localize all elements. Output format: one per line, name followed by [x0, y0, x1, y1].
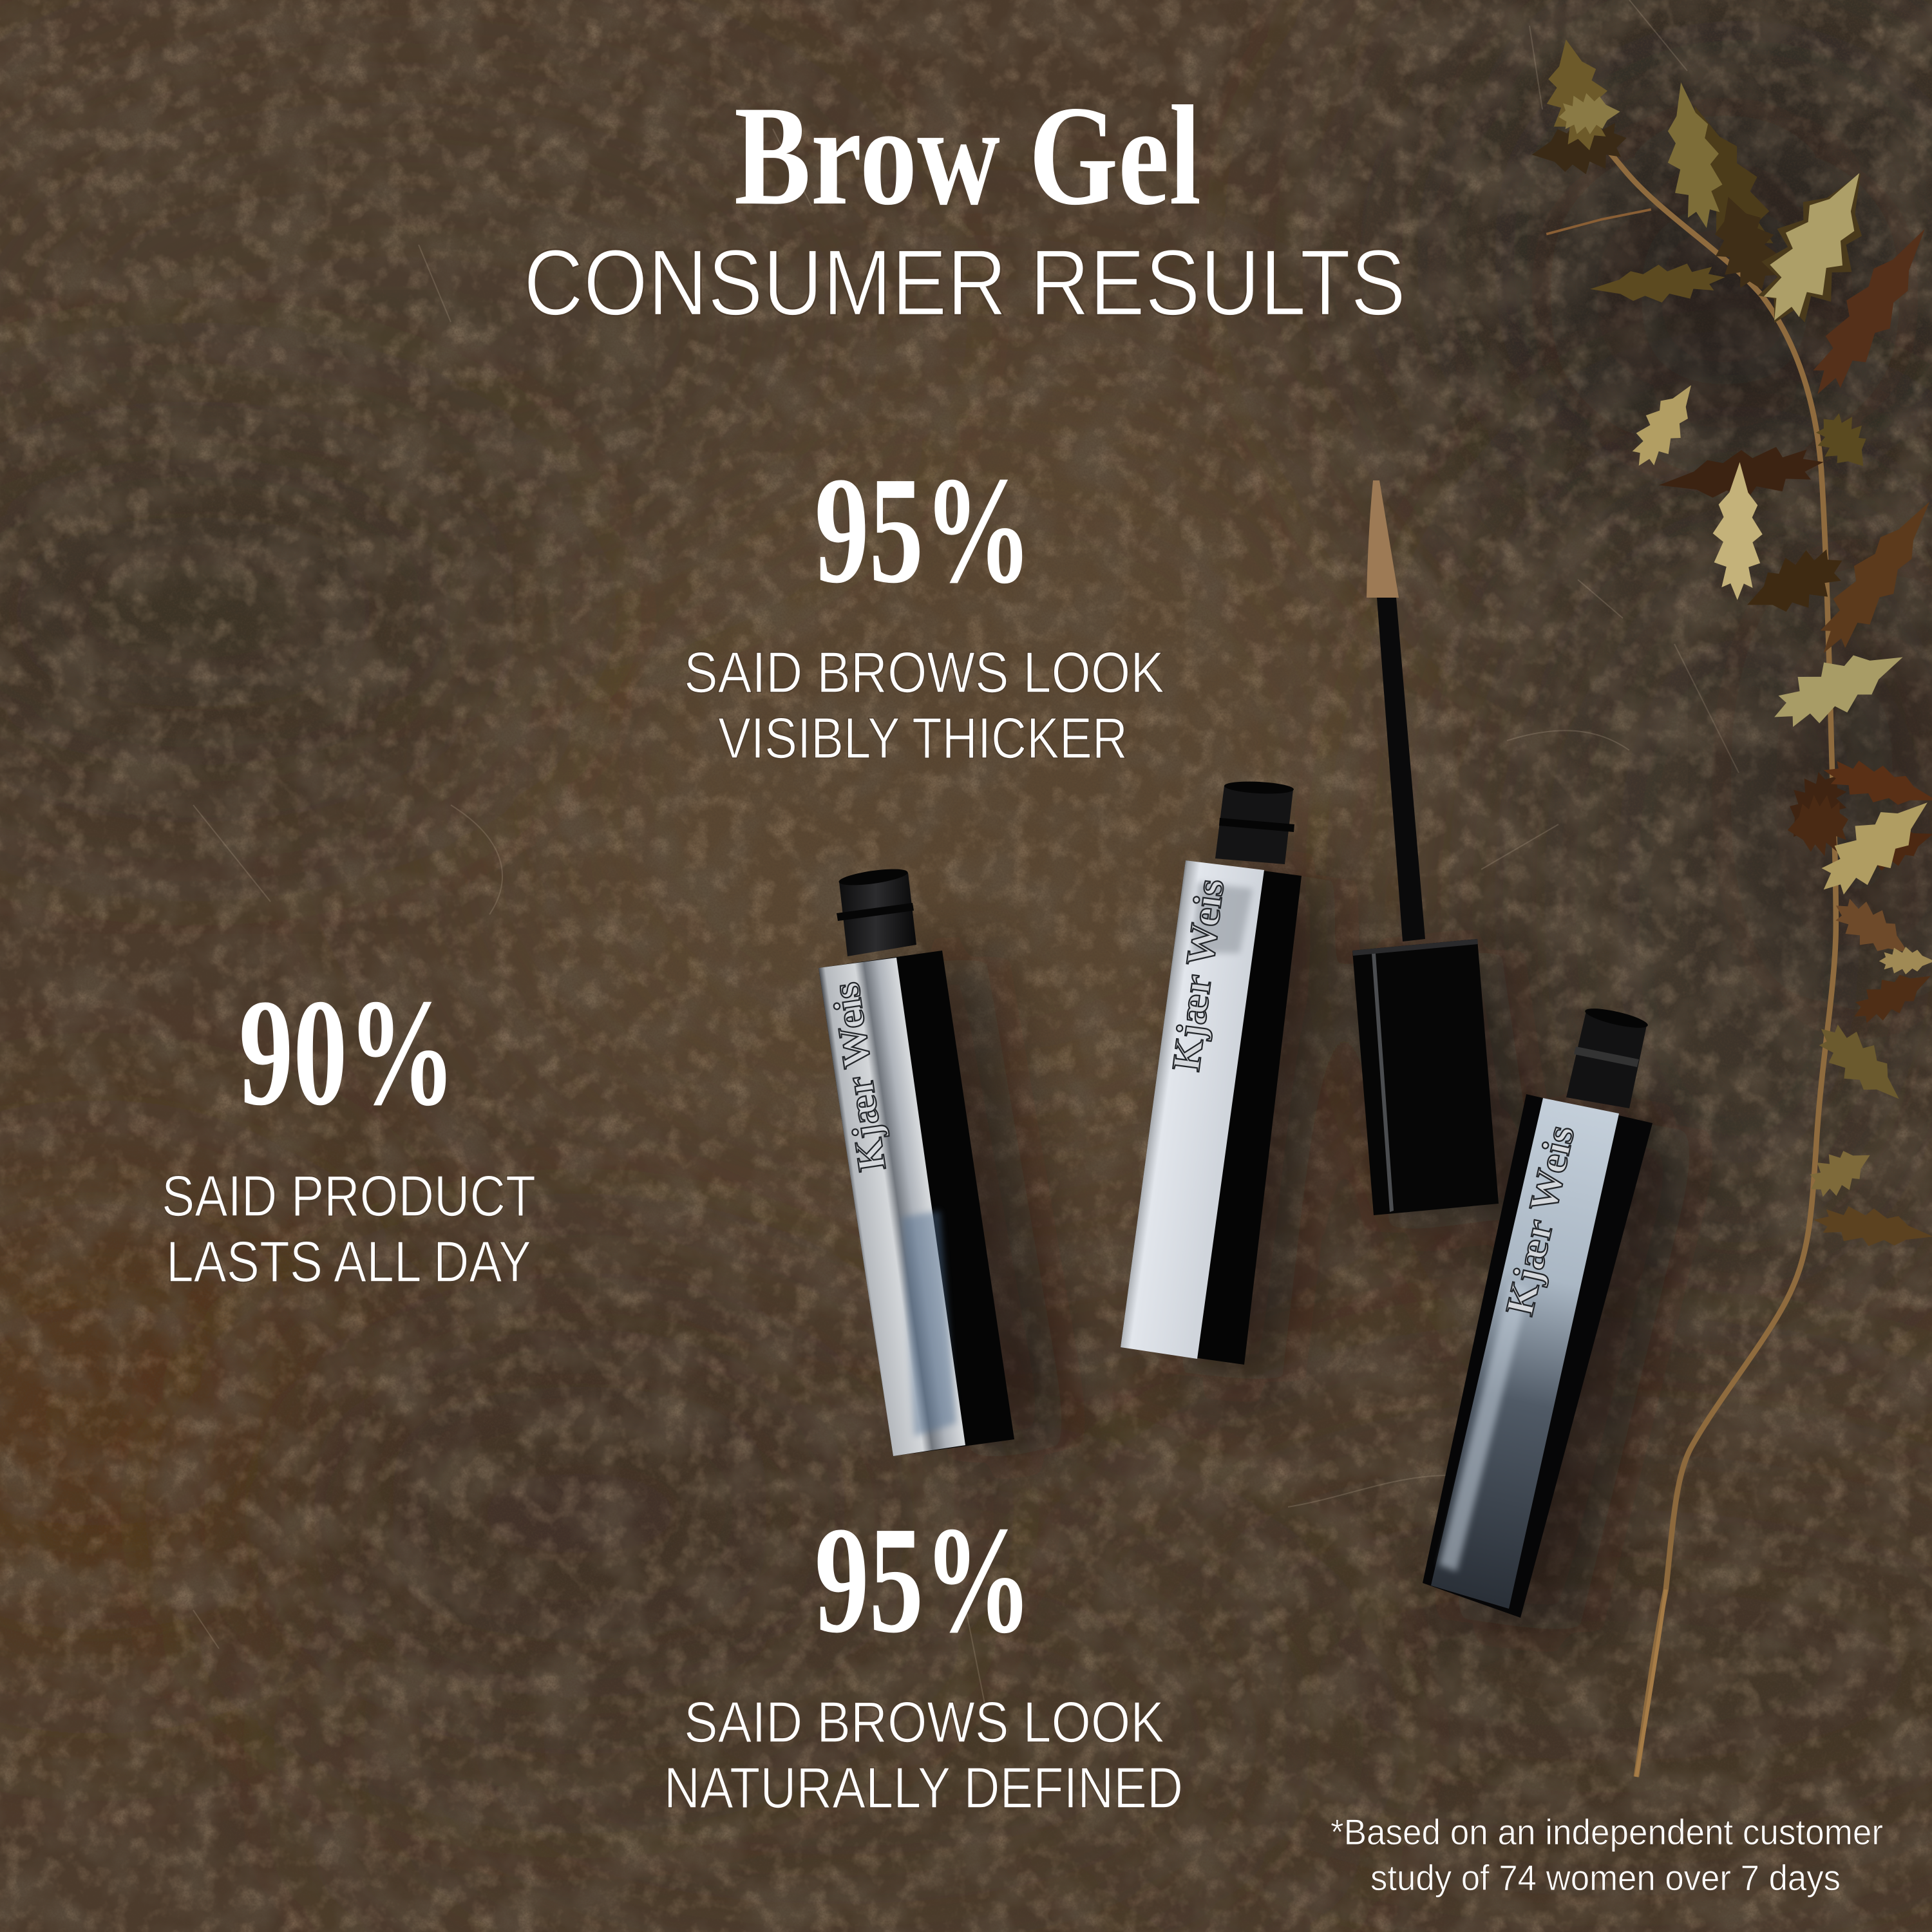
mascara tube: left — [819, 866, 1014, 1456]
title — [524, 77, 1406, 335]
stat: 95% visibly thicker: 95% — [815, 446, 1032, 615]
mascara products — [819, 480, 1700, 1636]
brand emboss: Kjær Weis — [824, 980, 895, 1174]
brand emboss: Kjær Weis — [1498, 1121, 1583, 1320]
mascara tube: right — [1423, 1005, 1653, 1618]
brand emboss: Kjær Weis — [1164, 876, 1233, 1074]
stat: 95% naturally defined — [664, 1495, 1183, 1821]
dried plant sprig — [1527, 33, 1932, 1777]
mascara wand with cap — [1352, 480, 1499, 1215]
stat: 90% lasts all day: SAID PRODUCT — [162, 1164, 536, 1229]
stat: 90% lasts all day — [162, 968, 536, 1294]
footnote: study of 74 women over 7 days — [1370, 1857, 1841, 1898]
stat: 95% naturally defined: SAID BROWS LOOK — [684, 1690, 1164, 1755]
stat: 95% visibly thicker — [684, 446, 1164, 771]
stat: 95% naturally defined: 95% — [815, 1495, 1032, 1665]
brush — [1367, 480, 1399, 598]
stat: 90% lasts all day: 90% — [239, 968, 456, 1137]
title: CONSUMER RESULTS — [524, 230, 1406, 335]
drop shadows — [902, 863, 1700, 1636]
mascara tube: center — [1121, 780, 1302, 1365]
footnote: *Based on an independent customer — [1331, 1812, 1883, 1852]
stat: 95% visibly thicker: SAID BROWS LOOK — [684, 641, 1164, 705]
stat: 95% naturally defined: NATURALLY DEFINED — [664, 1756, 1183, 1821]
title: Brow Gel — [734, 77, 1201, 235]
stat: 90% lasts all day: LASTS ALL DAY — [166, 1230, 531, 1294]
footnote — [1331, 1812, 1883, 1898]
stat: 95% visibly thicker: VISIBLY THICKER — [718, 706, 1128, 771]
